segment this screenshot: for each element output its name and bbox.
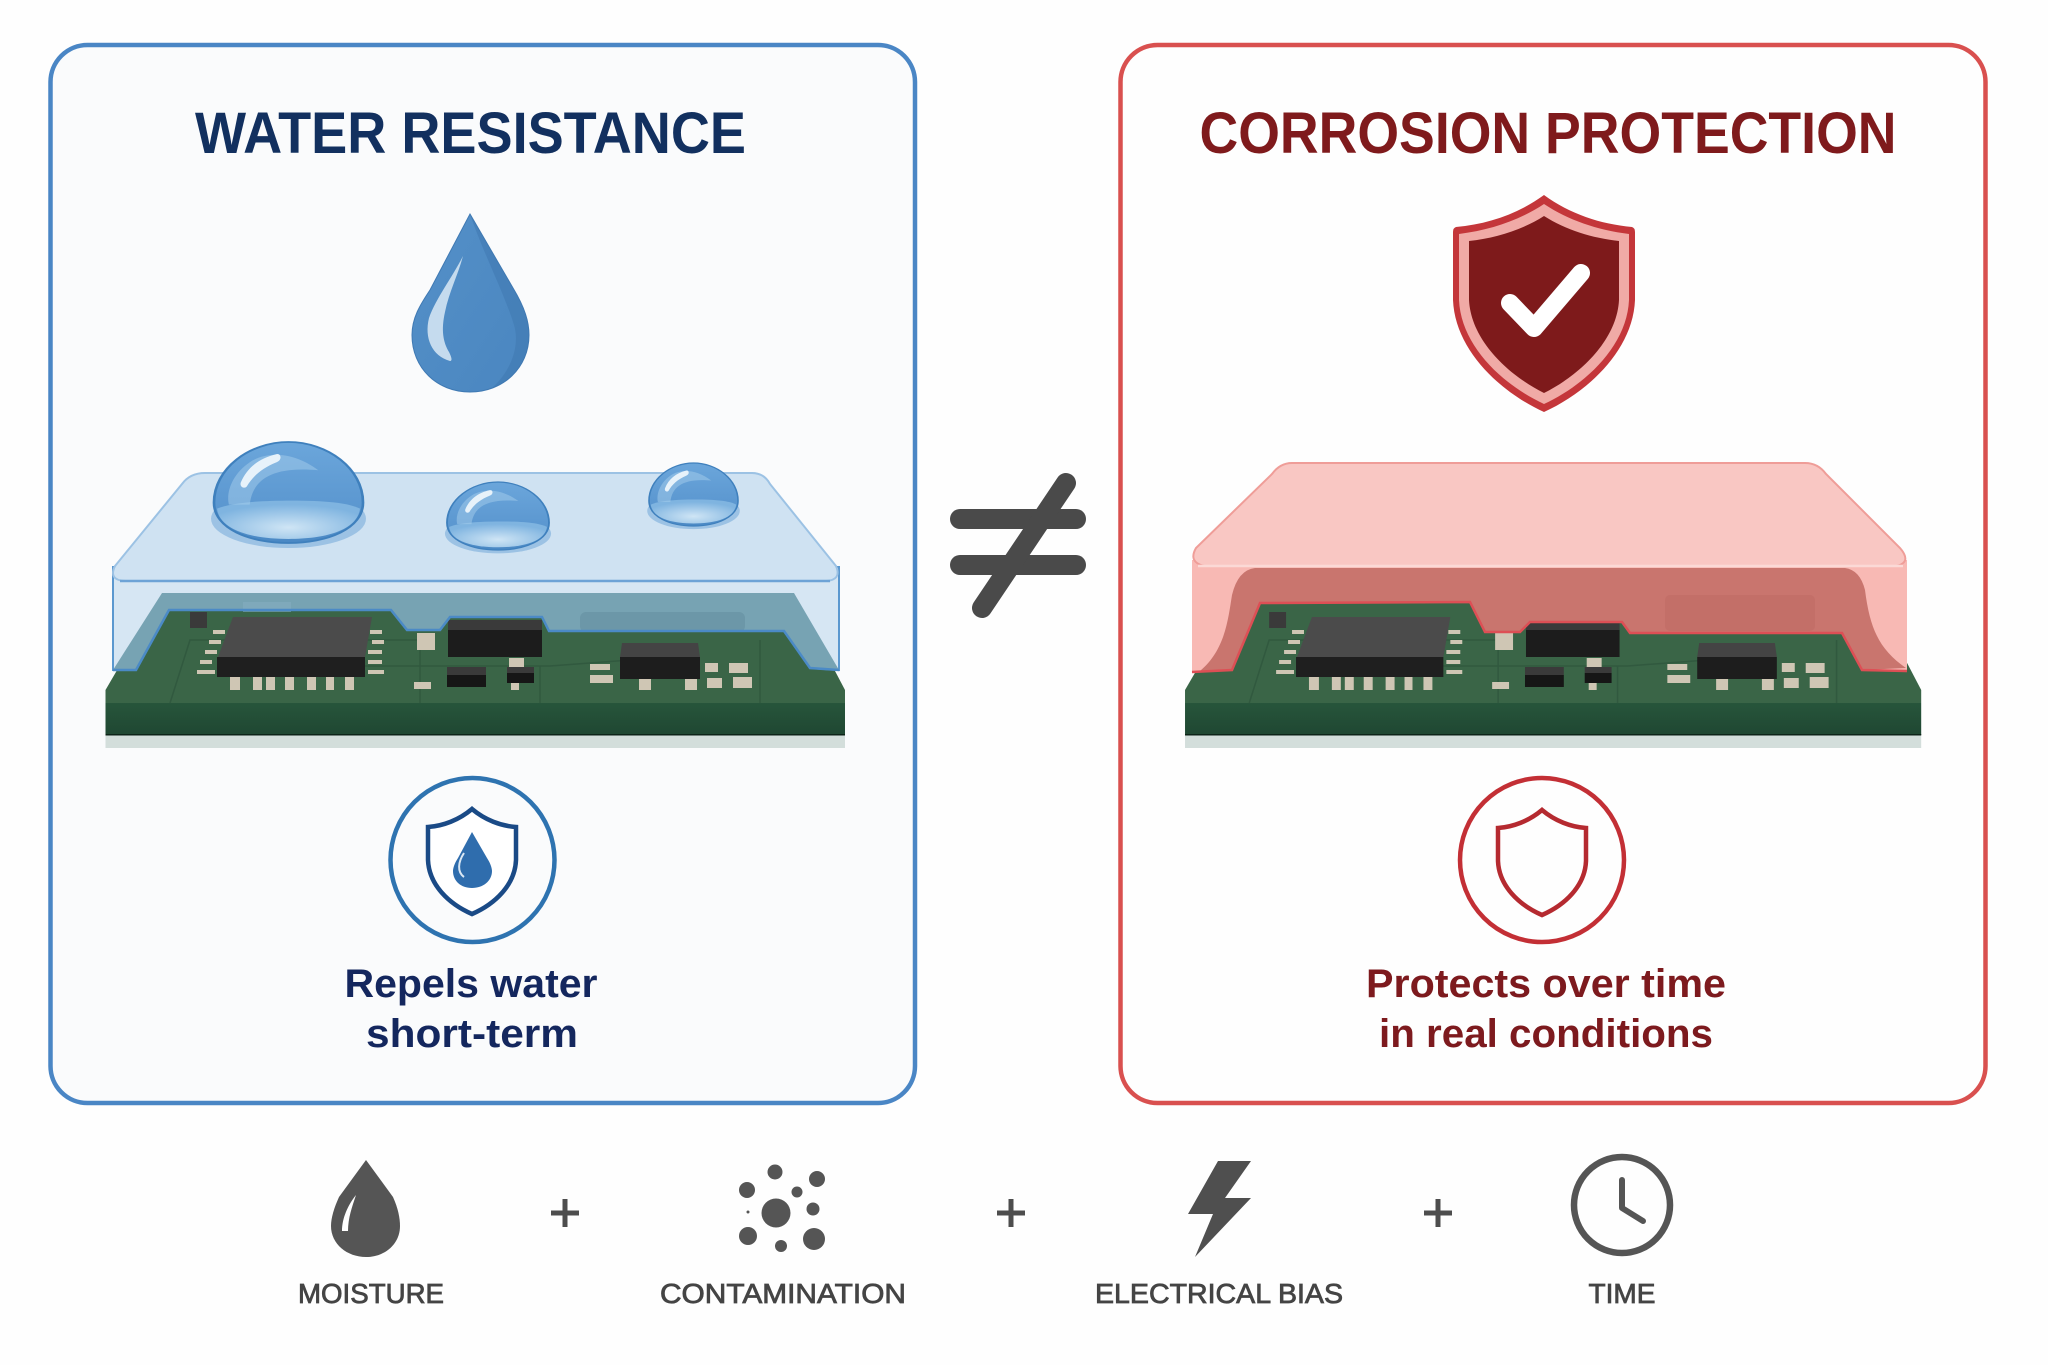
circuit board — [106, 593, 845, 748]
caption: protects over time in real conditions: Protects over time — [1366, 962, 1726, 1006]
icon: falling water drop — [412, 214, 529, 392]
illustration: circuit board with thin water-repellent coating — [106, 442, 845, 748]
caption: repels water short-term: Repels water — [344, 962, 598, 1006]
coating: edge line — [113, 610, 839, 670]
factor: contamination: CONTAMINATION — [660, 1278, 906, 1309]
panel frame: water resistance — [50, 45, 915, 1103]
icon: shield with check mark — [1453, 195, 1635, 412]
circuit board — [1185, 593, 1921, 748]
coating: dimmed board behind wall — [1200, 568, 1906, 671]
coating: edge line — [1192, 602, 1907, 672]
caption: protects over time in real conditions: in real conditions — [1379, 1012, 1713, 1056]
caption: protects over time in real conditions — [1366, 962, 1726, 1056]
factor: time — [1574, 1157, 1670, 1309]
water bead: medium — [445, 482, 551, 553]
plus sign — [551, 1199, 579, 1227]
panel frame: corrosion protection — [1120, 45, 1986, 1103]
caption: repels water short-term — [344, 962, 598, 1056]
water bead: large — [211, 442, 366, 548]
coating: top face — [113, 473, 838, 581]
factor: electrical bias — [1095, 1161, 1343, 1309]
panel: corrosion protection — [1120, 45, 1986, 1103]
factor: time: TIME — [1588, 1278, 1656, 1309]
coating: dimmed board behind wall — [113, 593, 839, 670]
factor: contamination — [660, 1164, 906, 1309]
heading: water resistance: WATER RESISTANCE — [195, 101, 746, 166]
panel: water resistance — [50, 45, 915, 1103]
factor: moisture — [298, 1160, 444, 1309]
plus sign — [1424, 1199, 1452, 1227]
coating: top face — [1193, 463, 1905, 566]
coating: front wall — [113, 567, 839, 670]
factor row — [298, 1157, 1670, 1309]
factor: electrical bias: ELECTRICAL BIAS — [1095, 1278, 1343, 1309]
illustration: circuit board with thick conformal coating — [1185, 463, 1921, 748]
coating: front wall — [1192, 560, 1907, 672]
heading: corrosion protection: CORROSION PROTECTION — [1200, 101, 1896, 166]
icon: outline shield in circle — [1460, 778, 1624, 942]
factor: moisture: MOISTURE — [298, 1278, 444, 1309]
water bead: small — [647, 463, 740, 529]
icon: shield with water drop in circle — [390, 778, 554, 942]
plus sign — [997, 1199, 1025, 1227]
not-equal symbol — [960, 483, 1076, 608]
caption: repels water short-term: short-term — [366, 1012, 578, 1056]
